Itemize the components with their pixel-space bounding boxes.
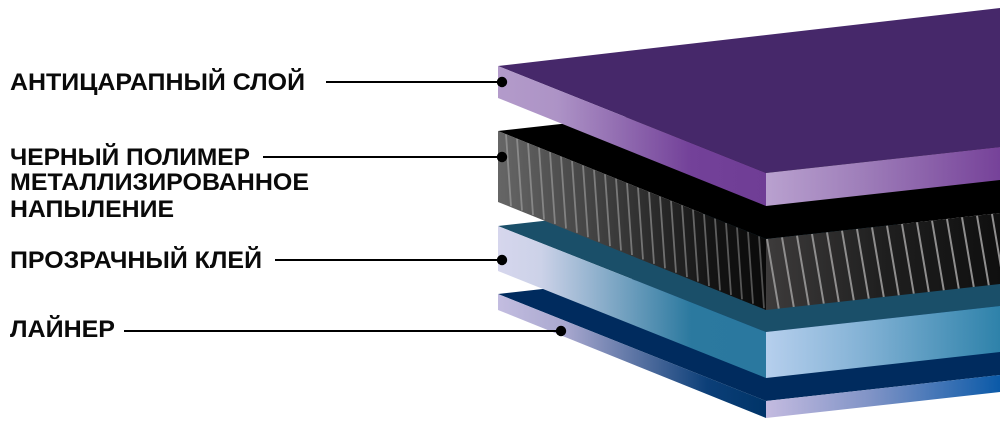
layer: liner	[498, 278, 1000, 418]
label: anti-scratch layer: АНТИЦАРАПНЫЙ СЛОЙ	[10, 68, 305, 96]
label: black polymer metallized coating	[10, 143, 309, 223]
leader: anti-scratch	[326, 77, 507, 87]
leader: adhesive	[275, 255, 507, 265]
layer: anti-scratch	[498, 8, 1000, 206]
leader: liner	[124, 326, 566, 336]
label: liner: ЛАЙНЕР	[10, 315, 115, 343]
label: transparent adhesive: ПРОЗРАЧНЫЙ КЛЕЙ	[10, 246, 262, 274]
leader: black polymer	[263, 152, 507, 162]
layer: black polymer metallized coating	[498, 116, 1000, 310]
layer: transparent adhesive	[498, 210, 1000, 378]
label: black polymer metallized coating: НАПЫЛЕНИЕ	[10, 196, 174, 223]
label: black polymer metallized coating: ЧЕРНЫЙ ПОЛИМЕР	[10, 143, 250, 171]
label: black polymer metallized coating: МЕТАЛЛИЗИРОВАННОЕ	[10, 169, 309, 196]
